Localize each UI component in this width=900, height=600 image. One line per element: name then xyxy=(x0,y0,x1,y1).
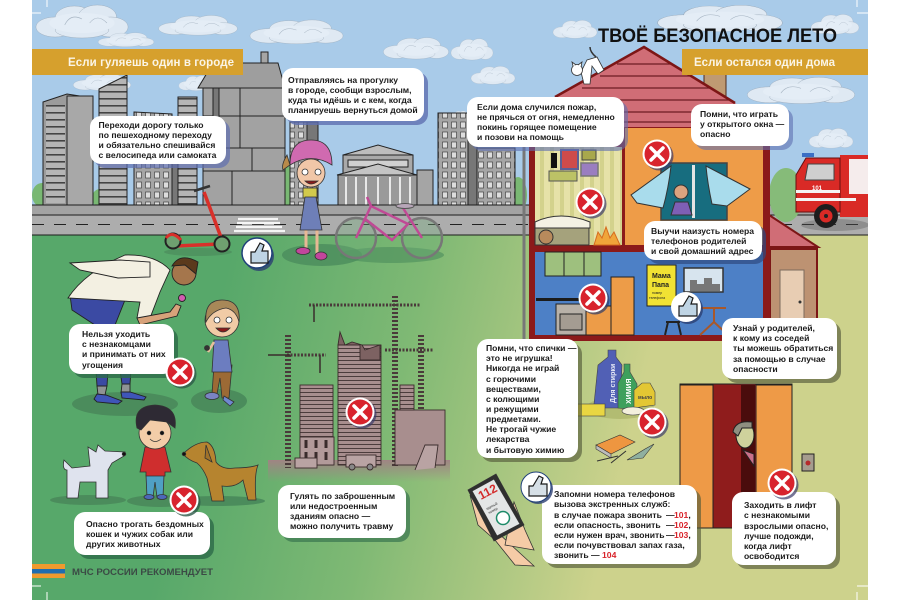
callout: abandoned buildings xyxy=(278,485,410,542)
callout: stray animals: других животных xyxy=(86,539,161,549)
matches and knife xyxy=(596,435,654,463)
callout: neighbours: за помощью в случае xyxy=(733,354,826,364)
icon: prohibition, window xyxy=(642,140,674,170)
callout: tell adults: куда ты идёшь и с кем, когда xyxy=(288,95,412,105)
brown dog xyxy=(171,442,265,506)
callout: crossing the road: и обязательно спешивайся xyxy=(98,140,215,150)
fire truck xyxy=(769,153,869,231)
callout: matches: с колющими xyxy=(486,394,539,404)
footer flag xyxy=(32,564,65,578)
callout: abandoned buildings: Гулять по заброшенным xyxy=(290,491,395,501)
sky xyxy=(32,0,868,206)
callout: emergency numbers: если почувствовал запах газа, xyxy=(554,540,685,550)
callout: emergency numbers: , xyxy=(688,510,691,520)
callout: matches xyxy=(477,339,582,462)
callout: learn phone numbers xyxy=(644,221,766,264)
callout: emergency numbers: 102 xyxy=(674,520,689,530)
callout: crossing the road xyxy=(90,116,230,168)
callout: neighbours: ты можешь обратиться xyxy=(733,343,833,353)
callout: emergency numbers: 101 xyxy=(674,510,689,520)
house xyxy=(529,47,770,341)
callout: emergency numbers: звонить — xyxy=(554,550,602,560)
callout: matches: Никогда не играй xyxy=(486,363,559,373)
callout: neighbours: к кому из соседей xyxy=(733,333,809,343)
callout: matches: и бытовую химию xyxy=(486,445,564,455)
callout: neighbours: опасности xyxy=(733,364,778,374)
callout: crossing the road: Переходи дорогу только xyxy=(98,120,203,130)
callout: stray animals: Опасно трогать бездомных xyxy=(86,519,204,529)
callout: emergency numbers: — xyxy=(666,530,675,540)
household chemicals: мыло xyxy=(638,395,652,401)
icon: prohibition, construction xyxy=(346,398,376,428)
phone in a hand: номер xyxy=(488,507,499,515)
boy with a lollipop xyxy=(191,300,247,413)
footer text: МЧС РОССИИ РЕКОМЕНДУЕТ xyxy=(72,567,213,578)
room: bedroom xyxy=(535,147,622,245)
white dog xyxy=(50,445,126,505)
fire truck: 101 xyxy=(812,186,823,192)
callout: learn phone numbers: Выучи наизусть номера xyxy=(651,226,754,236)
icon: prohibition, kitchen xyxy=(578,284,610,314)
section banner: city xyxy=(32,49,243,75)
callout: elevator: освободится xyxy=(744,551,799,561)
callout: tell adults: планируешь вернуться домой xyxy=(288,105,418,115)
callout: matches: с горючими xyxy=(486,374,536,384)
room: kitchen: Папа xyxy=(652,282,669,289)
callout: emergency numbers: 104 xyxy=(602,550,617,560)
callout: emergency numbers: , xyxy=(688,520,691,530)
callout: strangers: и принимать от них xyxy=(82,349,166,359)
callout: emergency numbers: если опасность, звонить xyxy=(554,520,661,530)
household chemicals: Для стирки xyxy=(610,364,617,403)
room: kitchen: Мама xyxy=(652,273,671,280)
callout: emergency numbers: 103 xyxy=(674,530,689,540)
room: kitchen: телефона xyxy=(649,296,665,300)
callout: elevator: когда лифт xyxy=(744,541,792,551)
callout: learn phone numbers: и свой домашний адрес xyxy=(651,246,754,256)
big grey building xyxy=(198,52,285,205)
callout: fire xyxy=(467,97,628,151)
room: kitchen xyxy=(535,252,763,335)
construction site xyxy=(268,296,450,482)
callout: matches: Помни, что спички — xyxy=(486,343,577,353)
callout: stray animals xyxy=(74,512,214,559)
callout: fire: не прячься от огня, немедленно xyxy=(477,112,615,122)
callout: elevator: Заходить в лифт xyxy=(744,500,817,510)
scooter xyxy=(164,186,232,256)
phone in a hand: 112 xyxy=(476,481,500,503)
icon: prohibition, animals xyxy=(170,486,200,516)
callout: strangers: с незнакомцами xyxy=(82,339,151,349)
callout: open window: опасно xyxy=(700,129,730,139)
callout: strangers xyxy=(69,324,178,378)
elevator xyxy=(680,384,814,528)
household chemicals xyxy=(577,350,655,419)
boy in a red sweater xyxy=(127,405,193,507)
city buildings xyxy=(43,75,515,205)
callout: neighbours xyxy=(722,318,841,383)
section banner: home: Если остался один дома xyxy=(694,57,836,69)
grass xyxy=(32,235,868,600)
room: kitchen: номер xyxy=(652,291,662,295)
bicycle xyxy=(336,197,444,263)
callout: crossing the road: с велосипеда или самоката xyxy=(98,150,217,160)
icon: thumbs up, kitchen xyxy=(671,292,703,324)
icon: prohibition, chemicals xyxy=(638,408,668,438)
phone in a hand: единый xyxy=(486,502,498,511)
callout: matches: и режущими xyxy=(486,404,539,414)
callout: emergency numbers: — xyxy=(666,510,675,520)
callout: emergency numbers: если нужен врач, звонить xyxy=(554,530,665,540)
callout: learn phone numbers: телефонов родителей xyxy=(651,236,746,246)
callout: emergency numbers: , xyxy=(688,530,691,540)
callout: emergency numbers: Запомни номера телефонов xyxy=(554,489,675,499)
room: window room xyxy=(625,128,763,245)
callout: elevator xyxy=(732,492,840,569)
callout: matches: предметами. xyxy=(486,414,541,424)
callout: emergency numbers: в случае пожара звонить xyxy=(554,510,662,520)
man bending over xyxy=(68,255,198,416)
drain pipe xyxy=(522,147,526,340)
callout: matches: это не игрушка! xyxy=(486,353,553,363)
girl in a helmet xyxy=(282,140,362,266)
callout: tell adults: в городе, сообщи взрослым, xyxy=(288,85,412,95)
callout: tell adults xyxy=(282,68,428,125)
icon: prohibition, strangers xyxy=(166,358,196,388)
icon: prohibition, fire xyxy=(576,188,606,218)
callout: neighbours: Узнай у родителей, xyxy=(733,323,815,333)
callout: stray animals: кошек и чужих собак или xyxy=(86,529,193,539)
house annex xyxy=(769,215,818,340)
section banner: city: Если гуляешь один в городе xyxy=(68,57,234,69)
callout: tell adults: Отправляясь на прогулку xyxy=(288,75,398,85)
callout: emergency numbers xyxy=(542,485,701,568)
callout: crossing the road: по пешеходному переходу xyxy=(98,130,212,140)
callout: emergency numbers: вызова экстренных служб: xyxy=(554,499,671,509)
callout: strangers: угощения xyxy=(82,360,123,370)
icon: thumbs up, emergency numbers xyxy=(521,472,553,504)
clouds xyxy=(36,5,859,148)
thumbs up icon xyxy=(242,238,274,271)
theatre xyxy=(337,145,433,205)
road xyxy=(32,205,868,235)
bushes behind the city xyxy=(32,166,527,213)
household chemicals: ХИМИЯ xyxy=(626,378,633,404)
callout: abandoned buildings: можно получить травму xyxy=(290,521,393,531)
callout: strangers: Нельзя уходить xyxy=(82,329,150,339)
callout: fire: покинь горящее помещение xyxy=(477,122,597,132)
callout: matches: лекарства xyxy=(486,434,530,444)
callout: matches: веществами, xyxy=(486,384,541,394)
phone in a hand xyxy=(468,474,534,566)
callout: emergency numbers: — xyxy=(666,520,675,530)
callout: elevator: взрослыми опасно, xyxy=(744,521,828,531)
callout: fire: Если дома случился пожар, xyxy=(477,102,596,112)
title: ТВОЁ БЕЗОПАСНОЕ ЛЕТО xyxy=(598,24,837,47)
section banner: home xyxy=(682,49,868,75)
callout: open window xyxy=(691,104,793,150)
callout: matches: Не трогай чужие xyxy=(486,424,556,434)
callout: elevator: лучше подожди, xyxy=(744,531,814,541)
callout: fire: и позови на помощь xyxy=(477,132,564,142)
callout: abandoned buildings: или недостроенным xyxy=(290,501,377,511)
callout: abandoned buildings: зданиям опасно — xyxy=(290,511,371,521)
callout: open window: у открытого окна — xyxy=(700,119,785,129)
callout: open window: Помни, что играть xyxy=(700,109,778,119)
cat on the roof xyxy=(572,47,604,84)
icon: prohibition, elevator xyxy=(768,468,798,500)
callout: elevator: с незнакомыми xyxy=(744,510,810,520)
